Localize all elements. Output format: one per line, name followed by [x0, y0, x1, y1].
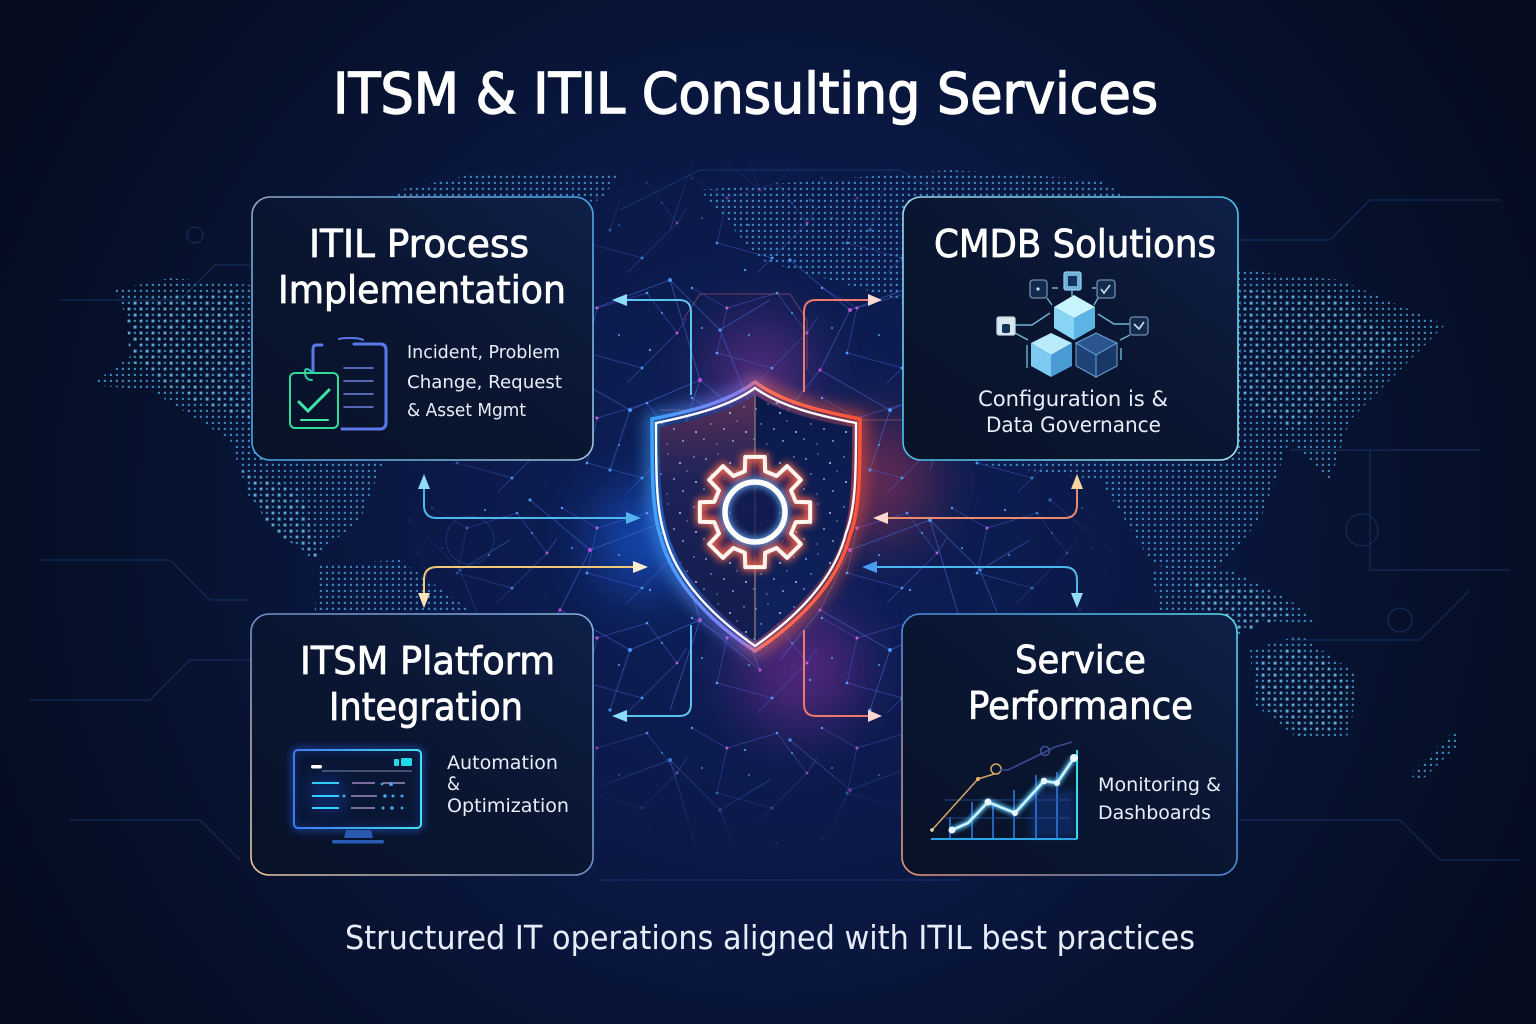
left cube — [1031, 333, 1072, 377]
heading: CMDB Solutions — [934, 222, 1216, 266]
title: ITSM & ITIL Consulting Services — [333, 62, 1158, 127]
heading: Performance — [968, 684, 1193, 728]
heading — [278, 222, 566, 312]
body text: Incident, Problem — [407, 342, 560, 363]
body text: Change, Request — [407, 372, 562, 393]
panel: CMDB Solutions — [903, 197, 1238, 460]
heading: Service — [1015, 638, 1146, 682]
body text: Configuration is & — [978, 387, 1168, 411]
icon: growth chart — [930, 742, 1078, 839]
shield left half — [660, 395, 755, 642]
body text: Optimization — [447, 795, 569, 817]
arrow: CMDB to shield — [873, 474, 1083, 524]
body text — [1098, 774, 1221, 824]
arrow: shield to CMDB — [804, 294, 882, 392]
icon: monitor — [294, 750, 421, 844]
tagline: Structured IT operations aligned with ITIL best practices — [345, 918, 1195, 957]
icon: clipboard — [290, 338, 386, 429]
top cube — [1054, 295, 1095, 340]
heading — [968, 638, 1193, 728]
body text: Monitoring & — [1098, 774, 1221, 796]
shield right half — [755, 395, 852, 642]
body text: & Asset Mgmt — [407, 400, 526, 421]
heading: ITIL Process — [309, 222, 529, 266]
body text — [407, 342, 562, 421]
arrow: ITSM Platform to shield — [418, 561, 648, 608]
heading: ITSM Platform — [300, 639, 555, 683]
body text: Data Governance — [986, 413, 1161, 437]
icon: gear — [700, 457, 810, 567]
dotted world map — [90, 170, 1458, 800]
body text: Automation — [447, 752, 558, 774]
shield — [652, 382, 860, 651]
panel: ITSM Platform Integration — [251, 614, 593, 875]
arrow: shield to ITIL Process — [612, 294, 691, 395]
arrow: shield to Service Performance — [804, 630, 882, 722]
panel: Service Performance — [902, 614, 1237, 875]
panel: ITIL Process Implementation — [252, 197, 593, 460]
body text: Dashboards — [1098, 802, 1211, 824]
arrow: Service Performance to shield — [862, 561, 1083, 608]
body text — [978, 387, 1168, 437]
heading: Integration — [329, 685, 523, 729]
right dark cube — [1076, 333, 1117, 377]
body text: & — [447, 773, 460, 795]
central network glow — [595, 320, 935, 730]
network of nodes — [400, 160, 1120, 880]
arrow: shield to ITSM Platform — [612, 625, 691, 722]
circuit traces — [30, 170, 1520, 880]
arrow: ITIL Process to shield — [418, 474, 641, 524]
body text — [447, 752, 569, 817]
heading — [300, 639, 555, 729]
small config nodes — [997, 272, 1148, 335]
icon: cubes — [997, 272, 1148, 377]
faint connector behind shield — [660, 294, 903, 420]
heading: Implementation — [278, 268, 566, 312]
